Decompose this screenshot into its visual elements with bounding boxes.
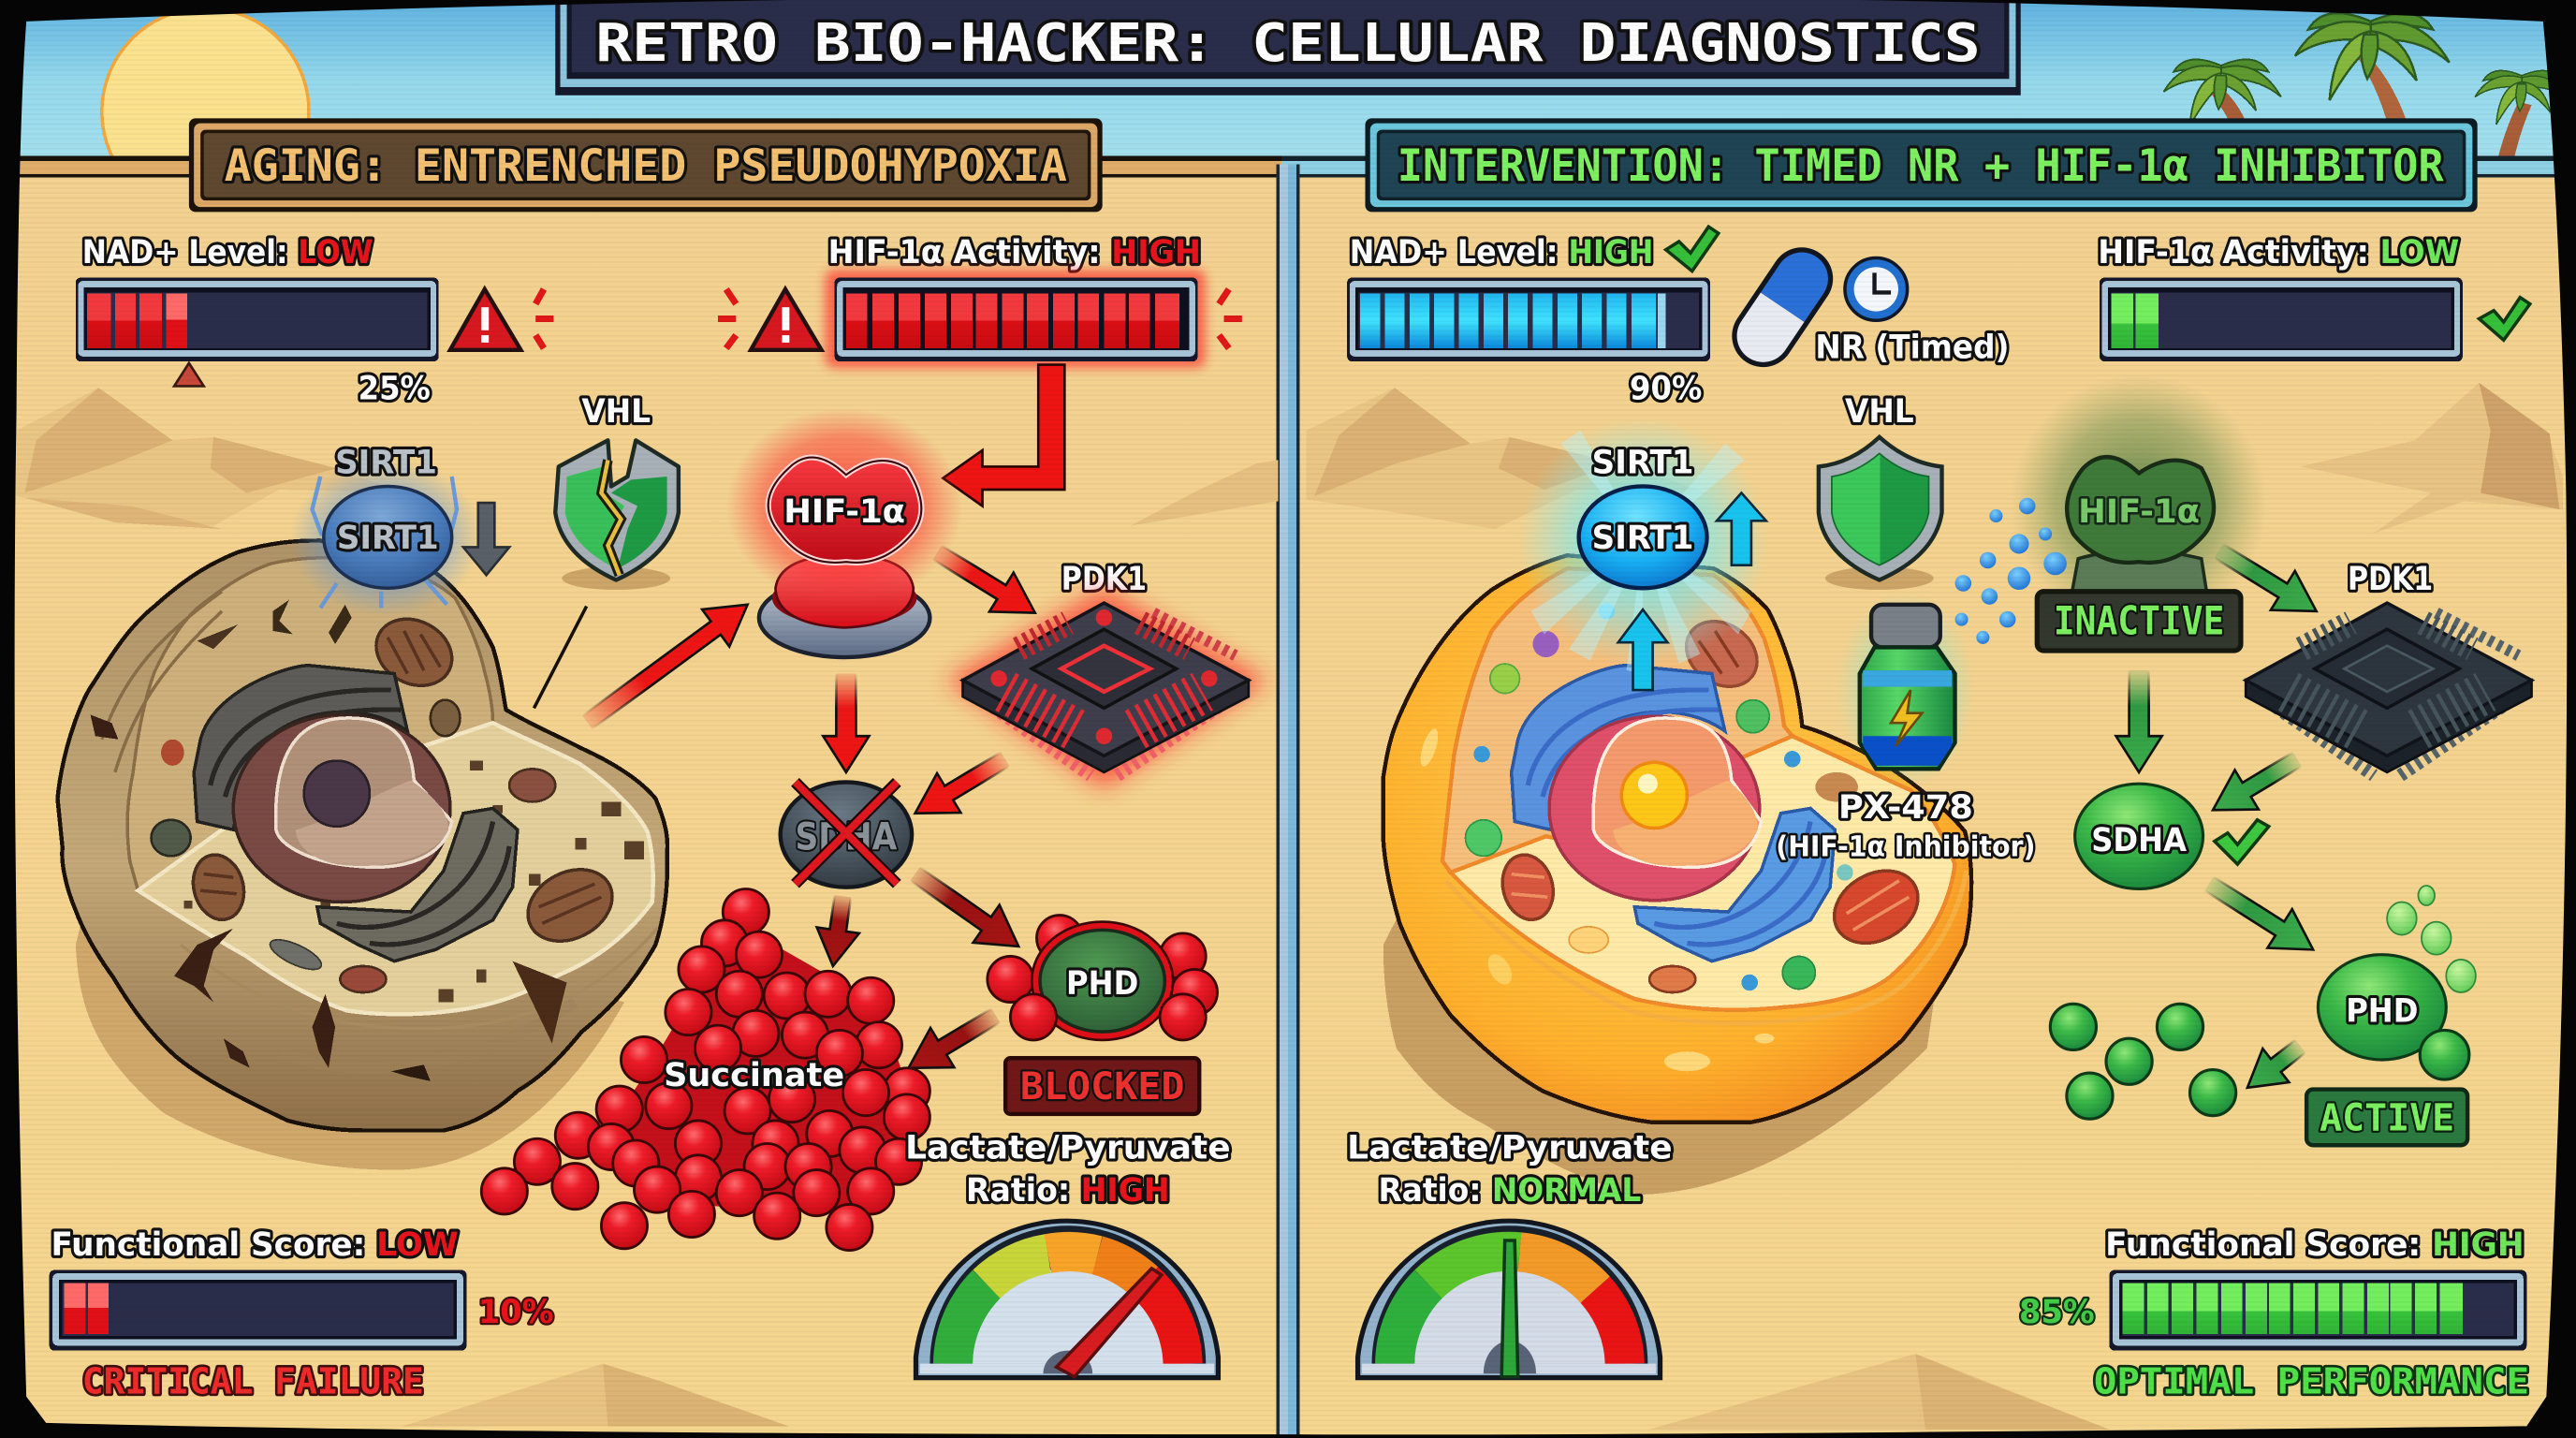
PHD blocked: PHD bbox=[1066, 964, 1138, 1003]
label: blocked bbox=[1005, 1058, 1199, 1114]
PDK1 label: PDK1 bbox=[2348, 560, 2433, 598]
SDHA node blocked bbox=[781, 782, 912, 888]
functional score label: Functional Score: HIGH bbox=[2105, 1225, 2525, 1264]
HIF-1a bar bbox=[2100, 278, 2463, 361]
SIRT1 faded bbox=[291, 443, 481, 616]
sand dunes bbox=[17, 383, 2563, 1430]
sun bbox=[102, 8, 309, 215]
label: blocked: BLOCKED bbox=[1020, 1064, 1184, 1108]
grey endoplasmic reticulum bbox=[194, 666, 407, 829]
title banner bbox=[555, 0, 2021, 95]
palm trees bbox=[2163, 13, 2570, 161]
functional score bar bbox=[50, 1270, 466, 1351]
SDHA node active: SDHA bbox=[2091, 821, 2187, 859]
status: critical failure: CRITICAL FAILURE bbox=[82, 1360, 424, 1402]
icon: warning triangle bbox=[450, 289, 554, 350]
lactate pyruvate label: Lactate/Pyruvate bbox=[905, 1128, 1231, 1167]
NAD percentage: 25% bbox=[359, 369, 431, 407]
arrow: HIF-1a to SDHA bbox=[2116, 670, 2162, 772]
functional score bar bbox=[2110, 1270, 2526, 1351]
crack line bbox=[534, 607, 587, 708]
label: active: ACTIVE bbox=[2320, 1095, 2454, 1139]
SDHA node blocked: SDHA bbox=[795, 814, 898, 858]
right cell bbox=[1383, 555, 1971, 1195]
HIF-1a inactive: HIF-1α bbox=[2078, 492, 2200, 531]
arrow: PDK1 to SDHA bbox=[903, 740, 1017, 833]
HIF-1a protein bbox=[726, 407, 963, 605]
arrow: SDHA to succinate bbox=[812, 893, 864, 969]
PHD blocked bbox=[988, 916, 1218, 1040]
PHD active bbox=[2318, 955, 2469, 1079]
bubbles bbox=[2387, 886, 2476, 992]
marker triangle bbox=[174, 363, 204, 386]
arrow: PHD to succinate bbox=[2234, 1030, 2314, 1105]
SIRT1 faded: SIRT1 bbox=[337, 519, 439, 557]
panel: aging bbox=[50, 233, 1268, 1402]
arrow: cell to SIRT1 bbox=[1618, 609, 1667, 690]
HIF-1a bar bbox=[825, 270, 1206, 368]
inhibitor droplets bbox=[1955, 498, 2067, 644]
subtitle: aging bbox=[189, 118, 1103, 212]
arrow: PHD to succinate bbox=[897, 996, 1008, 1088]
chip: PDK1 inactive bbox=[2246, 603, 2532, 775]
icon: check bbox=[1666, 227, 1719, 271]
VHL label: VHL bbox=[581, 392, 651, 431]
blue endoplasmic reticulum bbox=[1512, 666, 1835, 961]
mitochondria bbox=[364, 607, 463, 698]
NAD+ level label: NAD+ Level: HIGH bbox=[1350, 233, 1653, 271]
icon: VHL shield bbox=[1819, 437, 1942, 590]
HIF-1a button bbox=[759, 555, 929, 657]
arrow: HIF-1a to PDK1 bbox=[2206, 531, 2329, 631]
icon: broken VHL shield bbox=[555, 440, 679, 590]
nucleus bbox=[1549, 716, 1760, 901]
vial label: (HIF-1α Inhibitor) bbox=[1776, 830, 2036, 863]
functional percent: 10% bbox=[478, 1293, 554, 1331]
HIF-1a label: HIF-1α Activity: LOW bbox=[2098, 233, 2459, 271]
NR timed label: NR (Timed) bbox=[1815, 329, 2009, 367]
icon: check bbox=[2215, 820, 2269, 864]
succinate pile bbox=[481, 888, 929, 1251]
arrow: aged cell to HIF-1a bbox=[574, 586, 761, 741]
succinate pile: Succinate bbox=[664, 1056, 844, 1094]
icon: warning triangle and ticks bbox=[718, 289, 1242, 350]
succinate cleared bbox=[2050, 1004, 2236, 1119]
PHD active: PHD bbox=[2346, 992, 2418, 1031]
NAD+ level label: NAD+ Level: LOW bbox=[82, 233, 373, 271]
SIRT1 faded: SIRT1 bbox=[335, 443, 437, 481]
specks bbox=[184, 761, 644, 1003]
SIRT1 active: SIRT1 bbox=[1592, 519, 1693, 557]
chip: PDK1 active bbox=[946, 588, 1268, 788]
gauge: normal bbox=[1355, 1219, 1662, 1380]
arrow: SDHA to PHD bbox=[901, 855, 1032, 965]
left cell bbox=[57, 540, 667, 1170]
lactate pyruvate label bbox=[905, 1128, 1231, 1210]
arrow: SDHA to PHD bbox=[2197, 864, 2325, 969]
panel: intervention bbox=[1347, 227, 2532, 1402]
gauge: high bbox=[914, 1219, 1221, 1380]
NAD percentage: 90% bbox=[1630, 369, 1702, 407]
arrow: activity to HIF-1a bbox=[943, 365, 1064, 506]
lactate pyruvate label: Ratio: NORMAL bbox=[1379, 1171, 1641, 1210]
HIF-1a label: HIF-1α Activity: HIGH bbox=[828, 233, 1201, 271]
functional score label: Functional Score: LOW bbox=[51, 1225, 459, 1264]
arrow: PDK1 to SDHA bbox=[2201, 740, 2309, 829]
icon: PX-478 vial bbox=[1837, 592, 1975, 788]
arrow: HIF-1a to PDK1 bbox=[925, 533, 1047, 633]
vial label: PX-478 bbox=[1838, 788, 1973, 827]
subtitle: intervention: INTERVENTION: TIMED NR + HIF-1α INHIBITOR bbox=[1398, 140, 2444, 192]
VHL label: VHL bbox=[1845, 392, 1914, 431]
subtitle: aging: AGING: ENTRENCHED PSEUDOHYPOXIA bbox=[225, 140, 1067, 192]
status: optimal performance: OPTIMAL PERFORMANCE bbox=[2094, 1360, 2529, 1402]
NAD+ level bar bbox=[76, 278, 439, 361]
icon: clock bbox=[1845, 258, 1908, 320]
label: inactive: INACTIVE bbox=[2054, 597, 2224, 643]
lactate pyruvate label bbox=[1347, 1128, 1673, 1210]
vial label bbox=[1776, 788, 2036, 863]
lactate pyruvate label: Ratio: HIGH bbox=[966, 1171, 1170, 1210]
HIF-1a protein: HIF-1α bbox=[783, 492, 905, 531]
HIF-1a inactive bbox=[2011, 374, 2267, 631]
arrow: SIRT1 up bbox=[1717, 493, 1766, 565]
icon: check bbox=[2479, 298, 2530, 340]
cracks bbox=[174, 929, 233, 1003]
NAD+ level bar bbox=[1347, 278, 1710, 361]
SIRT1 active bbox=[1518, 418, 1767, 674]
nucleus bbox=[233, 714, 450, 902]
PDK1 label: PDK1 bbox=[1061, 560, 1147, 598]
title banner: RETRO BIO-HACKER: CELLULAR DIAGNOSTICS bbox=[595, 13, 1981, 74]
icon: NR pill bbox=[1720, 235, 1845, 379]
lactate pyruvate label: Lactate/Pyruvate bbox=[1347, 1128, 1673, 1167]
SDHA node active bbox=[2075, 784, 2203, 888]
subtitle: intervention bbox=[1365, 118, 2478, 212]
label: active bbox=[2306, 1090, 2467, 1145]
arrow: HIF-1a to SDHA bbox=[823, 674, 869, 772]
functional percent: 85% bbox=[2019, 1293, 2095, 1331]
SIRT1 active: SIRT1 bbox=[1592, 443, 1693, 481]
arrow: SIRT1 down bbox=[463, 503, 509, 575]
